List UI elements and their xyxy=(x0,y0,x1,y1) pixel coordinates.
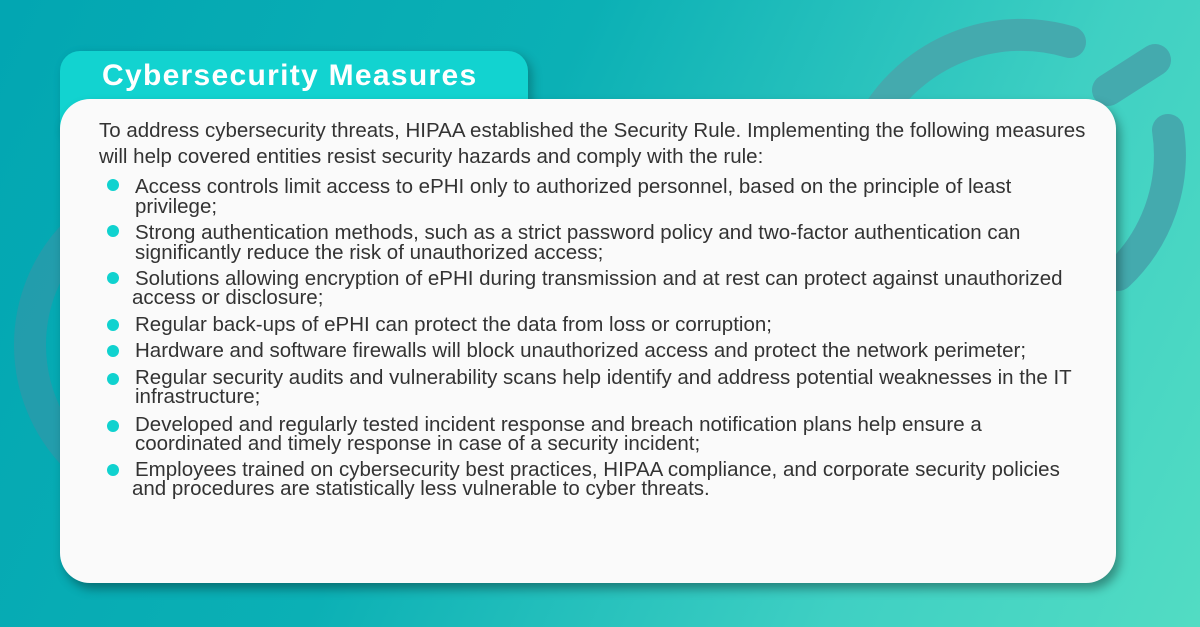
bullet list: Solutions allowing encryption of ePHI during transmission and at rest can protect against unauthorized xyxy=(135,267,1063,290)
bullet list: Access controls limit access to ePHI only to authorized personnel, based on the principle of least xyxy=(135,175,1011,198)
bullet list: access or disclosure; xyxy=(132,286,323,309)
bullet list: privilege; xyxy=(135,195,217,218)
bullet list: and procedures are statistically less vulnerable to cyber threats. xyxy=(132,477,710,500)
title: Cybersecurity Measures xyxy=(102,59,477,92)
bullet list: Strong authentication methods, such as a strict password policy and two-factor authentication can xyxy=(135,221,1020,244)
bullet list: Regular back-ups of ePHI can protect the data from loss or corruption; xyxy=(135,313,772,336)
bullet list: significantly reduce the risk of unauthorized access; xyxy=(135,241,603,264)
bullet list xyxy=(107,175,1072,500)
bullet list: Developed and regularly tested incident response and breach notification plans help ensure a xyxy=(135,413,982,436)
title tab xyxy=(60,51,528,131)
intro text: To address cybersecurity threats, HIPAA established the Security Rule. Implementing the following measures xyxy=(99,119,1085,142)
intro text xyxy=(99,119,1085,168)
bullet list: infrastructure; xyxy=(135,385,260,408)
intro text: will help covered entities resist security hazards and comply with the rule: xyxy=(99,145,763,168)
panel: measures card xyxy=(60,99,1116,583)
bullet list: coordinated and timely response in case of a security incident; xyxy=(135,432,700,455)
bullet list: Employees trained on cybersecurity best practices, HIPAA compliance, and corporate security policies xyxy=(135,458,1060,481)
bullet list: Hardware and software firewalls will block unauthorized access and protect the network perimeter; xyxy=(135,339,1026,362)
bullet list: Regular security audits and vulnerability scans help identify and address potential weaknesses in the IT xyxy=(135,366,1072,389)
